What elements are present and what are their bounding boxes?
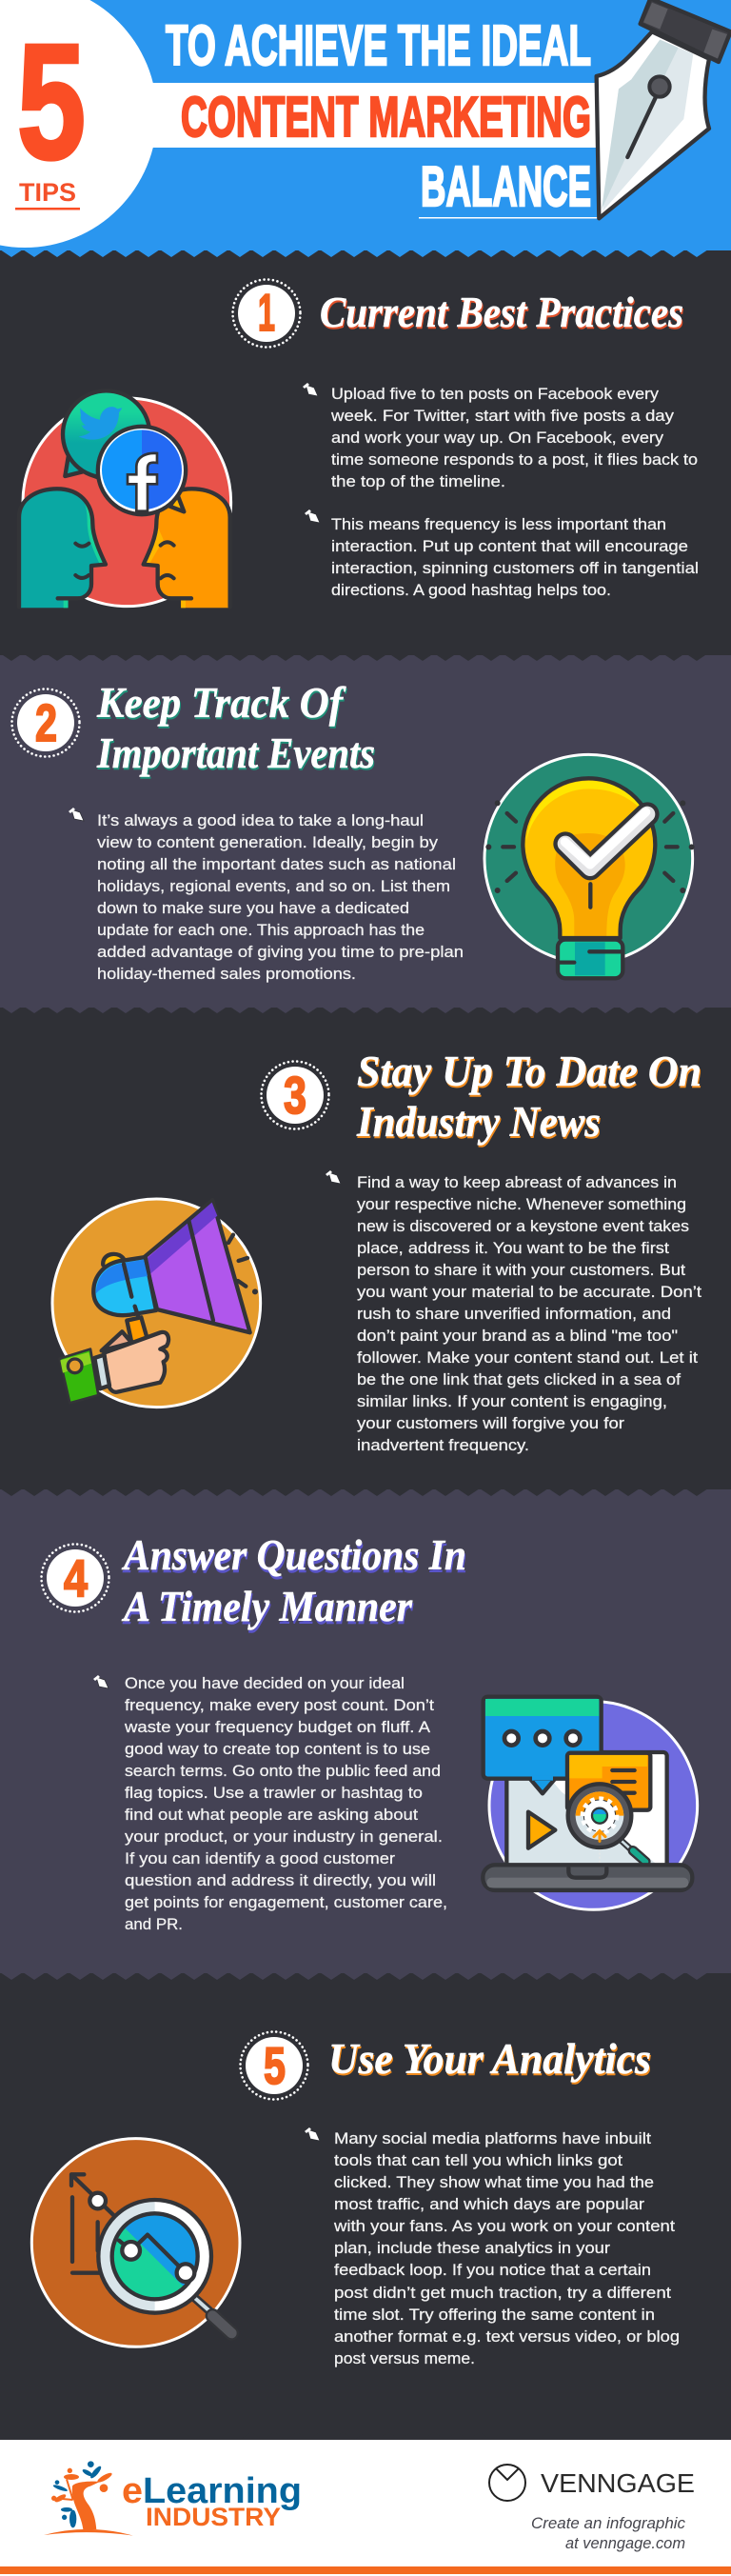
document [567, 1753, 650, 1810]
text block: tip 2 body: down to make sure you have a dedicated [97, 900, 409, 917]
text block: paragraph 2: interaction, spinning customers off in tangential [331, 560, 699, 577]
left head [19, 489, 106, 608]
text block: tip 5 body: post didn’t get much traction, try a different [334, 2285, 671, 2302]
text block: tip 5 body: post versus meme. [334, 2350, 475, 2367]
icon: chart under magnifier [31, 2139, 240, 2346]
heading 4: Answer Questions In [121, 1531, 466, 1579]
icon: laptop with speech bubble and gear [483, 1697, 698, 1909]
text block: tip 2 body: added advantage of giving you time to pre-plan [97, 944, 464, 961]
panel: section 3 background [0, 1008, 731, 1497]
text block: paragraph 2: interaction. Put up content that will encourage [331, 538, 688, 555]
text block: paragraph 2 [331, 516, 699, 599]
icon: bullet [69, 808, 84, 821]
panel: tip 4 [42, 1531, 698, 1933]
number badge 5 [240, 2032, 308, 2099]
big number 5: 5 [17, 10, 86, 193]
text block: tip 2 body: It’s always a good idea to take a long-haul [97, 812, 424, 829]
text block: paragraph 1: and work your way up. On Facebook, every [331, 429, 664, 447]
panel: footer [0, 2461, 731, 2574]
magnifier handle [195, 2298, 231, 2333]
text block: tip 4 body: flag topics. Use a trawler or hashtag to [125, 1785, 423, 1802]
laptop base [483, 1865, 692, 1890]
heading 1: Current Best Practices [320, 289, 683, 336]
text block: tip 3 body: person to share it with your customers. But [357, 1262, 685, 1279]
speech bubble [484, 1697, 602, 1793]
text block: tip 5 body: plan, include these analytics in your [334, 2240, 611, 2257]
heading 3: Stay Up To Date On [357, 1048, 701, 1095]
text block: paragraph 1: week. For Twitter, start with five posts a day [330, 408, 675, 425]
text block: tip 4 body: search terms. Go onto the public feed and [125, 1763, 441, 1780]
number badge 4 [42, 1545, 109, 1611]
icon: venngage circle [489, 2465, 525, 2501]
check mark [564, 812, 647, 869]
icon: fountain pen nib [597, 0, 731, 218]
text block: tip 4 body: find out what people are asking about [125, 1807, 418, 1824]
text block: tip 2 body: holiday-themed sales promotions. [97, 966, 356, 983]
magnifier lens [98, 2193, 222, 2313]
wordmark: industry: INDUSTRY [146, 2503, 281, 2531]
icon: bullet [303, 383, 318, 396]
icon: megaphone in hand [52, 1199, 261, 1408]
text block: tip 5 body: clicked. They show what time you had the [334, 2174, 654, 2191]
bulb base [558, 940, 622, 978]
text block: tip 3 body: follower. Make your content stand out. Let it [357, 1349, 698, 1367]
text block: tip 2 body: view to content generation. Ideally, begin by [97, 834, 439, 851]
panel: section 2 background [0, 655, 731, 1013]
text block: tip 4 body: good way to create top content is to use [125, 1741, 430, 1758]
text block: tip 5 body: feedback loop. If you notice that a certain [334, 2262, 651, 2279]
text block: tip 4 body: If you can identify a good customer [125, 1850, 396, 1867]
facebook circle [96, 425, 188, 516]
heading 3 [356, 1048, 701, 1146]
panel: header [0, 0, 731, 257]
tips underline [15, 208, 80, 210]
text block: paragraph 1: time someone responds to a post, it flies back to [331, 451, 698, 469]
text block: tip 3 body: place, address it. You want to be the first [357, 1240, 669, 1257]
text block: tip 5 body: with your fans. As you work on your content [333, 2218, 675, 2235]
heading 3: Industry News [356, 1098, 601, 1146]
text block: tip 3 body: inadvertent frequency. [357, 1437, 529, 1454]
panel: section 1 background [0, 250, 731, 661]
panel: tip 5 [31, 2032, 680, 2367]
number badge 1 [232, 280, 301, 347]
wordmark: eLearning [122, 2471, 302, 2511]
logo: eLearning Industry [44, 2461, 302, 2536]
number badge 3 [261, 1061, 329, 1129]
tips label: TIPS [19, 178, 76, 207]
text block: tip 3 body: your respective niche. Whenever something [357, 1196, 686, 1213]
icon: bullet [326, 1170, 341, 1184]
number badge 3: 3 [284, 1066, 306, 1125]
heading 4: A Timely Manner [121, 1583, 412, 1630]
heading 2 [96, 679, 375, 777]
text block: tip 3 body: be the one link that gets clicked in a sea of [357, 1371, 681, 1388]
magnifier with gear [568, 1784, 645, 1864]
text block: tip 5 body: most traffic, and which days are popular [334, 2196, 645, 2213]
title line 3: BALANCE [421, 155, 591, 218]
text block: tip 4 body: get points for engagement, customer care, [125, 1894, 447, 1911]
heading 2: Important Events [96, 729, 375, 777]
text block: paragraph 1 [330, 386, 698, 490]
number badge 2 [11, 689, 80, 756]
text block: tip 5 body: tools that can tell you which links got [334, 2152, 622, 2169]
text block: tip 3 body: your customers will forgive you for [357, 1415, 625, 1432]
text block: tip 2 body: update for each one. This approach has the [97, 922, 425, 939]
number badge 4: 4 [64, 1548, 88, 1608]
text block: tip 5 body: time slot. Try offering the same content in [334, 2306, 655, 2324]
text block: tip 3 body: Find a way to keep abreast of advances in [357, 1174, 677, 1191]
title band [143, 83, 598, 148]
text block: tip 2 body [97, 812, 464, 983]
text block: paragraph 1: Upload five to ten posts on Facebook every [331, 386, 660, 403]
text block: tip 3 body: rush to share unverified information, and [357, 1306, 671, 1323]
panel: section 5 background [0, 1973, 731, 2440]
text block: tip 3 body: similar links. If your content is engaging, [357, 1393, 667, 1410]
icon: tree [44, 2461, 133, 2536]
number badge 2: 2 [35, 693, 57, 752]
panel: tip 1 [19, 280, 699, 608]
text block: tip 4 body: and PR. [125, 1916, 183, 1933]
text block: tip 4 body: your product, or your industry in general. [125, 1828, 443, 1846]
text block: tip 4 body: Once you have decided on your ideal [125, 1675, 405, 1692]
number badge 5: 5 [264, 2036, 286, 2095]
wordmark: venngage: VENNGAGE [541, 2468, 695, 2498]
icon: social media heads [19, 390, 231, 608]
heading 2: Keep Track Of [96, 679, 346, 727]
text block: tip 5 body [333, 2130, 680, 2367]
text block: paragraph 2: This means frequency is less important than [331, 516, 666, 533]
white circle [0, 0, 157, 248]
icon: light bulb with check mark [484, 754, 693, 978]
text block: tip 3 body: don’t paint your brand as a blind "me too" [357, 1328, 678, 1345]
text block: tip 4 body: waste your frequency budget on fluff. A [124, 1719, 430, 1736]
right head [144, 489, 230, 608]
text block: tip 2 body: noting all the important dates such as national [97, 856, 456, 873]
text block: tip 3 body [357, 1174, 701, 1454]
panel: section 4 background [0, 1489, 731, 1980]
tagline: Create an infographic [531, 2514, 685, 2532]
text block: tip 3 body: new is discovered or a keystone event takes [357, 1218, 689, 1235]
panel: tip 3 [52, 1048, 701, 1454]
text block: paragraph 1: the top of the timeline. [331, 473, 505, 490]
twitter speech bubble [63, 390, 149, 478]
heading 5: Use Your Analytics [328, 2035, 651, 2083]
heading 4 [121, 1531, 466, 1630]
text block: tip 3 body: you want your material to be accurate. Don’t [357, 1284, 701, 1301]
panel: tip 2 [11, 679, 693, 983]
text block: tip 4 body: question and address it directly, you will [125, 1872, 436, 1889]
bottom bar [0, 2566, 731, 2574]
text block: tip 5 body: Many social media platforms have inbuilt [334, 2130, 651, 2147]
text block: tip 4 body: frequency, make every post count. Don’t [125, 1697, 434, 1714]
icon: bullet [305, 2127, 320, 2141]
logo: Venngage: at venngage.com [565, 2534, 685, 2552]
logo: Venngage [489, 2465, 695, 2552]
text block: tip 5 body: another format e.g. text versus video, or blog [334, 2328, 680, 2346]
number badge 1: 1 [258, 283, 275, 342]
icon: bullet [305, 509, 320, 523]
balance underline [419, 217, 598, 219]
text block: paragraph 2: directions. A good hashtag helps too. [331, 582, 611, 599]
icon: bullet [93, 1675, 109, 1688]
text block: tip 4 body [124, 1675, 447, 1933]
text block: tip 2 body: holidays, regional events, and so on. List them [97, 878, 450, 895]
